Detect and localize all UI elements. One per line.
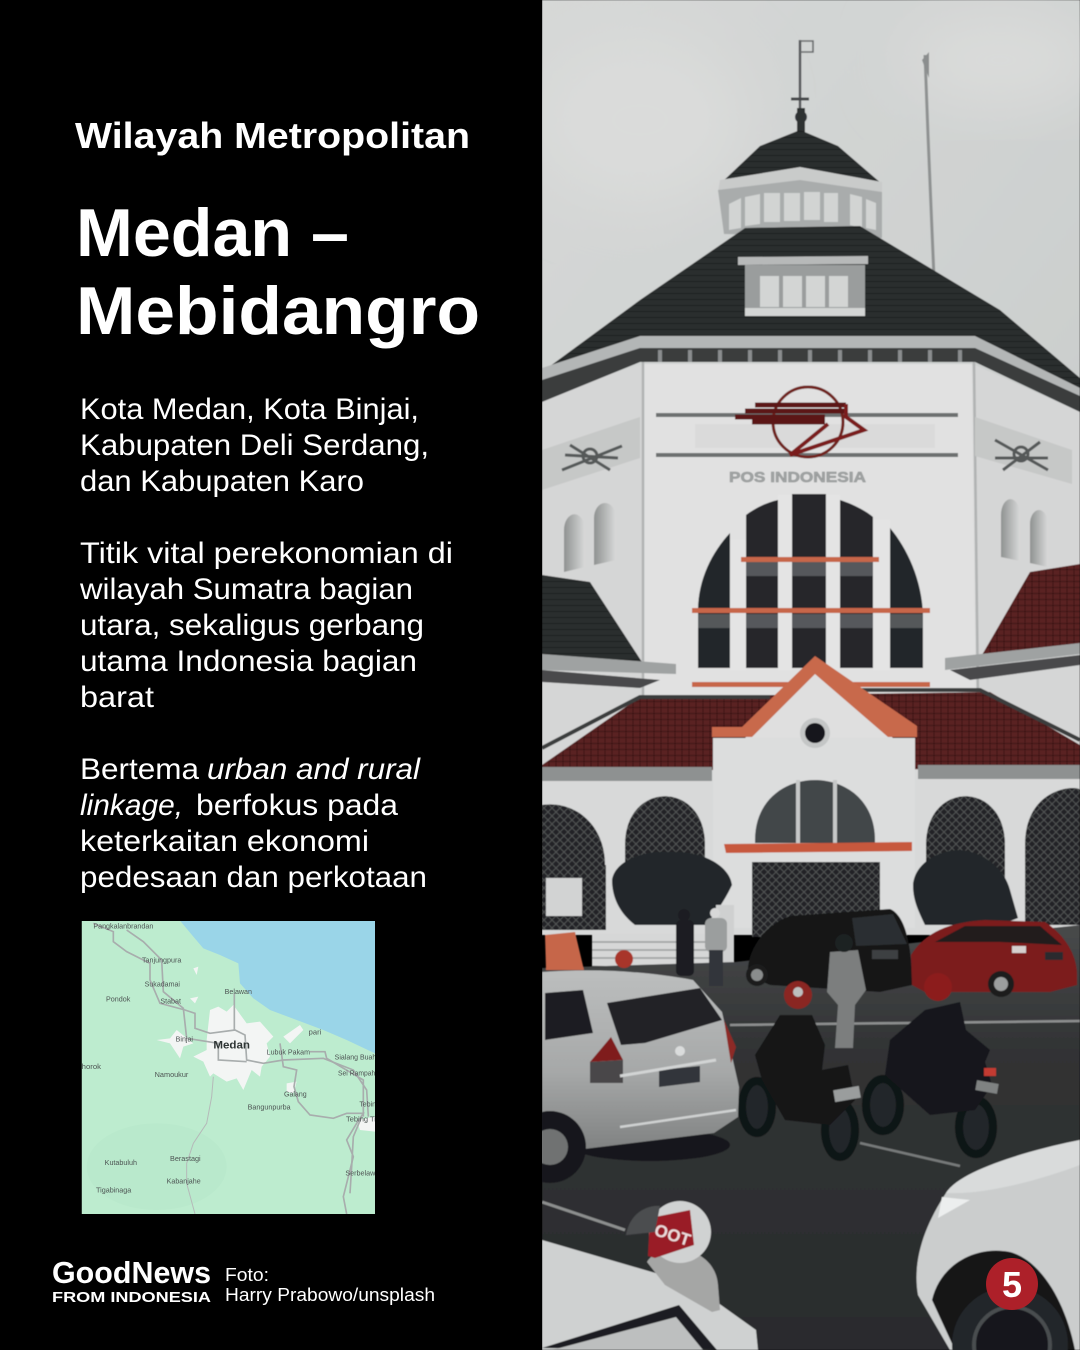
map labels: Namoukur: [155, 1072, 189, 1079]
black SUV: [746, 909, 912, 992]
map labels: Galang: [284, 1092, 307, 1099]
map labels: Sukadamai: [145, 981, 180, 988]
road network: [93, 923, 368, 1214]
main heading line 2: Mebidangro: [76, 273, 480, 349]
sign: POS INDONESIA: POS INDONESIA: [729, 469, 866, 486]
text block: theme: Bertema: [80, 753, 199, 786]
map labels: Sialang Buah: [335, 1054, 376, 1061]
map labels: Kabanjahe: [167, 1179, 201, 1186]
logo: GoodNews from Indonesia: GoodNews: [52, 1255, 211, 1290]
lower red roof: [542, 690, 1080, 772]
map labels: [82, 923, 376, 1195]
silver MPV: [542, 970, 740, 1183]
main roof: [552, 226, 1080, 388]
text block: theme: linkage,: [80, 789, 183, 822]
map labels: Bangunpurba: [248, 1104, 291, 1111]
text block: theme: keterkaitan ekonomi: [80, 825, 369, 858]
pedestrian: [827, 934, 866, 1048]
map labels: Kutabuluh: [105, 1160, 137, 1167]
large arched window: [692, 494, 930, 687]
people on the sidewalk: [545, 908, 727, 986]
lower facade wall: [542, 765, 1080, 935]
map labels: Sei Rampah: [338, 1070, 375, 1077]
page number badge: 5: [1002, 1264, 1022, 1305]
upper roof and lantern: [718, 130, 882, 238]
white car, lower right: [917, 1140, 1080, 1350]
map label: Medan: Medan: [213, 1040, 250, 1052]
title: [75, 115, 480, 349]
text block: theme: berfokus pada: [196, 789, 398, 822]
text block: theme: urban and rural: [207, 753, 421, 786]
map labels: Tebing Ti: [346, 1116, 376, 1123]
logo: GoodNews from Indonesia: [52, 1255, 211, 1306]
text block: theme: [80, 753, 427, 894]
motorcycle rider 1: [742, 981, 861, 1157]
text block: economic role: utama Indonesia bagian: [80, 645, 417, 678]
Pos Indonesia logo: [735, 387, 864, 457]
text block: regions: dan Kabupaten Karo: [80, 465, 364, 498]
sea: [180, 921, 375, 1053]
rider with white helmet: [626, 1201, 720, 1312]
photo credit: Harry Prabowo/unsplash: [225, 1285, 435, 1305]
map labels: Belawan: [225, 989, 252, 996]
map labels: Berastagi: [170, 1156, 201, 1163]
small arched niches: [564, 499, 1048, 572]
text block: regions: Kabupaten Deli Serdang,: [80, 429, 429, 462]
darker highlands: [87, 1123, 227, 1210]
text block: theme: pedesaan dan perkotaan: [80, 861, 427, 894]
text block: economic role: wilayah Sumatra bagian: [79, 573, 413, 606]
logo: GoodNews from Indonesia: FROM INDONESIA: [52, 1289, 211, 1306]
motorcycle rider 2: [866, 973, 999, 1154]
red hatchback: [911, 920, 1077, 997]
map labels: Lubuk Pakam: [267, 1050, 310, 1057]
map labels: Pangkalanbrandan: [93, 923, 153, 930]
text block: economic role: [79, 537, 453, 714]
photo credit: Foto:: [225, 1265, 269, 1285]
map labels: Tebin: [359, 1101, 376, 1108]
land: [82, 921, 375, 1214]
text block: economic role: barat: [80, 681, 155, 714]
bushes: [612, 850, 1018, 925]
photo credit: [225, 1265, 435, 1305]
white car, lower left: [542, 1240, 758, 1350]
photo: Pos Indonesia building in Medan: [514, 0, 1080, 1350]
side roofs: [542, 564, 1080, 688]
sky: [542, 0, 1080, 412]
map labels: pari: [309, 1030, 322, 1037]
main heading line 1: Medan –: [76, 195, 349, 271]
page number badge: [986, 1258, 1038, 1310]
text block: economic role: Titik vital perekonomian di: [80, 537, 453, 570]
road: [542, 925, 1080, 1350]
map labels: horok: [82, 1064, 102, 1071]
map labels: Stabat: [160, 998, 181, 1005]
text block: regions: [80, 393, 429, 498]
arcades with lattice: [542, 788, 1080, 930]
map labels: Tanjungpura: [142, 957, 181, 964]
map labels: Binjai: [176, 1037, 193, 1044]
urban areas: [157, 967, 375, 1132]
text block: economic role: utara, sekaligus gerbang: [80, 609, 424, 642]
map of the Medan region: [82, 921, 376, 1214]
kicker heading: Wilayah Metropolitan: [75, 115, 470, 156]
entrance steps: [546, 878, 734, 966]
map labels: Pondok: [106, 997, 131, 1004]
map labels: Tigabinaga: [96, 1188, 131, 1195]
central gable porch: [712, 656, 917, 937]
rider with white helmet: OOT: [652, 1221, 693, 1250]
building upper facade: [542, 336, 1080, 800]
text block: regions: Kota Medan, Kota Binjai,: [80, 393, 419, 426]
antenna and finial: [791, 40, 934, 278]
frieze ornaments: [542, 415, 1072, 490]
map labels: Serbelaw: [345, 1170, 376, 1177]
